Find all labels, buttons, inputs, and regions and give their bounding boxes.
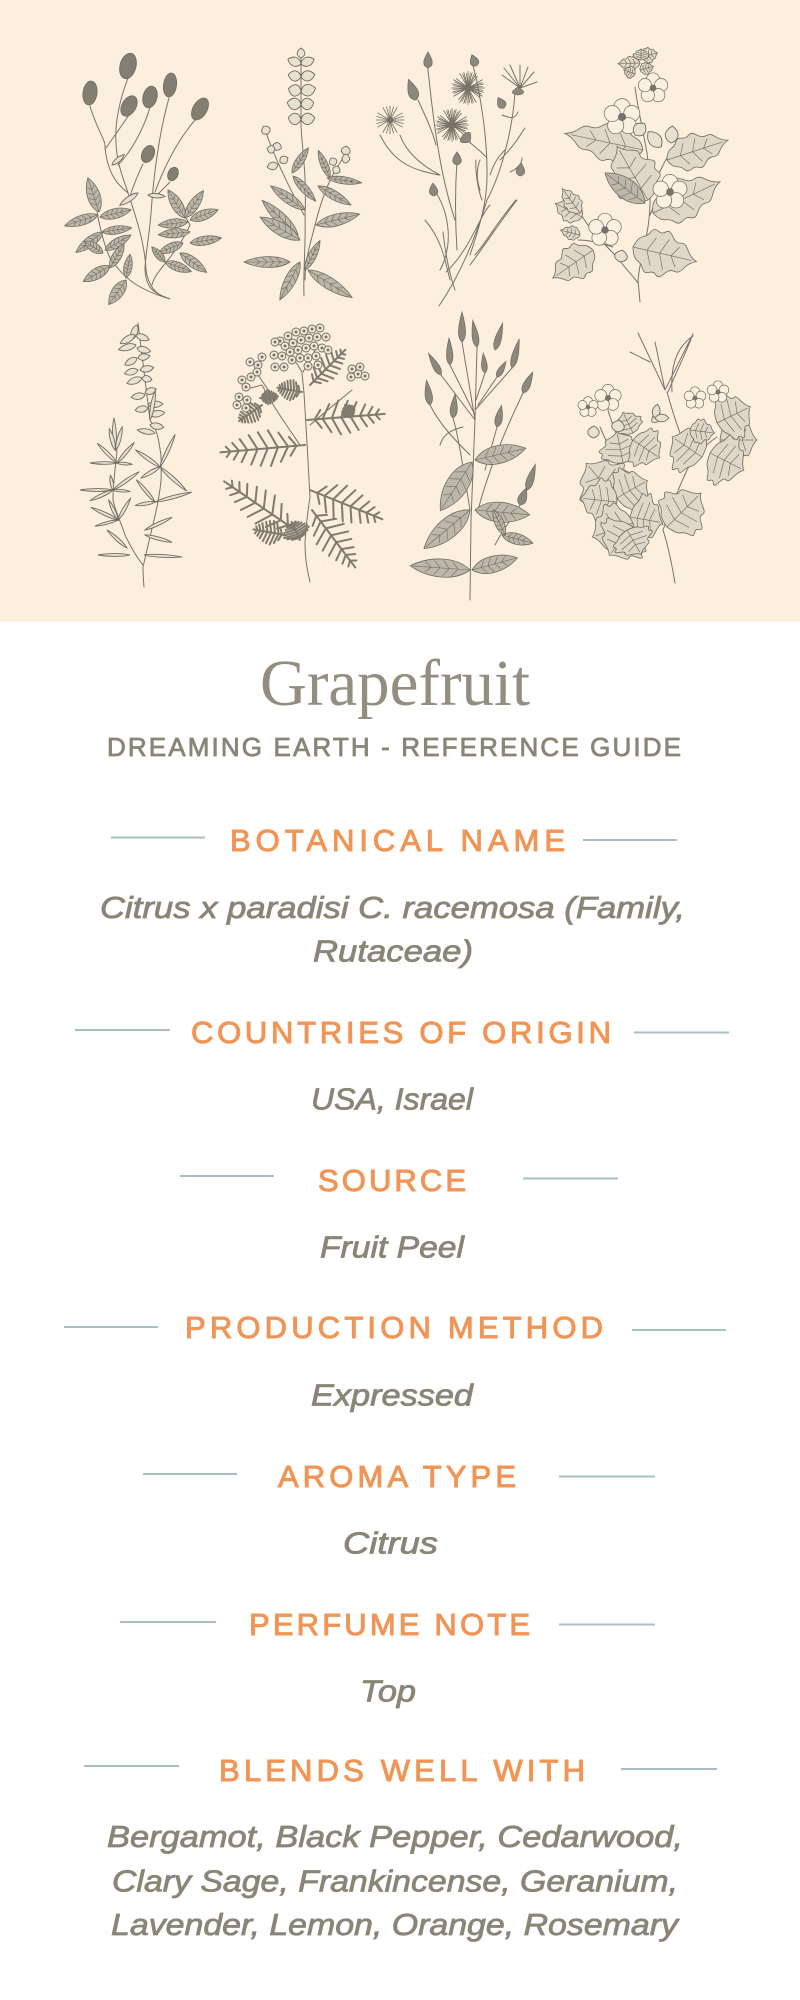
illustration: mallow [543,45,733,302]
value: botanical name: Citrus x paradisi C. racemosa (Family, [100,890,685,925]
panel: botanical illustrations hero [0,0,800,622]
value: blends well with: Lavender, Lemon, Orange, Rosemary [111,1907,681,1942]
illustration: burnet with oval flower heads [63,51,222,308]
title: Grapefruit [260,647,530,720]
value: blends well with [107,1819,683,1942]
heading: countries of origin: COUNTRIES OF ORIGIN [191,1015,611,1050]
value: botanical name: Rutaceae) [313,934,473,968]
section: production method [64,1310,726,1412]
value: blends well with: Clary Sage, Frankincense, Geranium, [112,1864,678,1898]
value: botanical name [100,890,685,968]
hero background [0,0,800,622]
illustration: tansy with fern leaves [214,324,389,582]
section: countries of origin [75,1015,729,1116]
heading: perfume note: PERFUME NOTE [249,1607,530,1642]
illustration: cornflower [376,52,537,306]
heading: source: SOURCE [318,1163,466,1198]
value: source: Fruit Peel [320,1230,465,1264]
section: aroma type [143,1459,655,1560]
illustration: clary sage with flower spike [244,48,362,303]
value: countries of origin: USA, Israel [311,1082,474,1116]
heading: production method: PRODUCTION METHOD [185,1310,603,1345]
section: botanical name [100,823,685,968]
value: blends well with: Bergamot, Black Pepper, Cedarwood, [107,1819,683,1854]
heading: botanical name: BOTANICAL NAME [230,823,565,858]
illustration: celandine with lobed leaves [564,333,761,583]
illustration: vervain with pointed spikes [410,312,539,600]
section: blends well with [84,1753,717,1942]
value: production method: Expressed [311,1378,475,1412]
heading: blends well with: BLENDS WELL WITH [219,1753,585,1788]
value: aroma type: Citrus [343,1526,438,1560]
heading: aroma type: AROMA TYPE [278,1459,516,1494]
value: perfume note: Top [360,1674,416,1708]
subtitle: DREAMING EARTH - REFERENCE GUIDE [107,732,681,762]
illustration: hyssop with narrow leaves [80,323,192,587]
section: source [180,1163,618,1264]
section: perfume note [120,1607,655,1708]
